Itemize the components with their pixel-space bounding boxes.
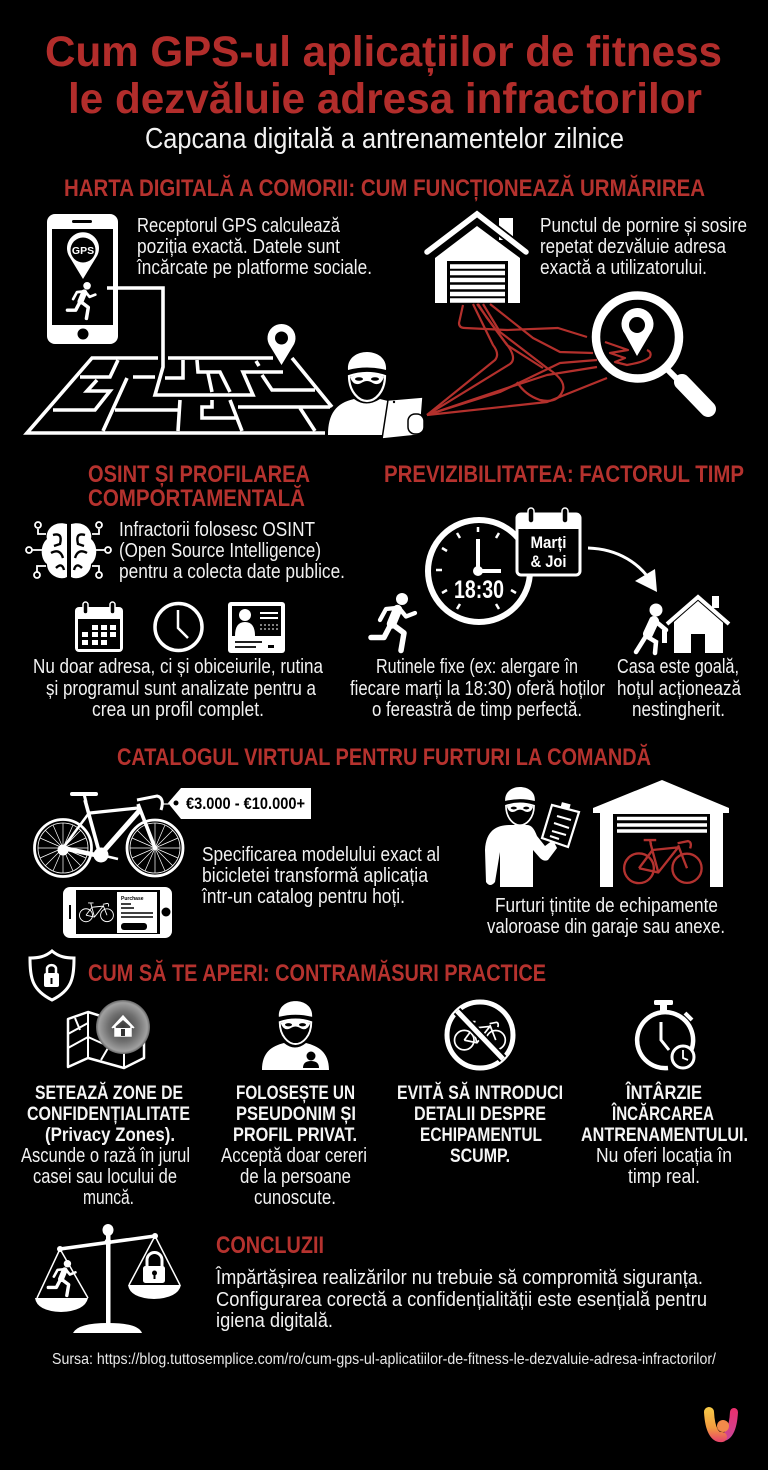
text: nu doar adresa: și programul sunt analizate pentru a [46, 678, 317, 700]
icon: street map with route [27, 288, 332, 433]
text: receptorul GPS: încărcate pe platforme sociale. [136, 257, 372, 279]
icon: road bike [34, 794, 183, 876]
icon: phone with listing [63, 887, 172, 938]
text: specificarea modelului [201, 844, 440, 908]
text: rutinele fixe: fiecare marți la 18:30) oferă hoților [350, 678, 605, 700]
icon: clock 18:30 [428, 520, 530, 622]
text: nu doar adresa: crea un profil complet. [92, 699, 264, 721]
heading: countermeasures: CUM SĂ TE APERI: CONTRAMĂSURI PRACTICE [88, 959, 546, 987]
panel: catalog [34, 743, 729, 938]
panel: previzibilitatea [350, 461, 744, 721]
heading: catalog: CATALOGUL VIRTUAL PENTRU FURTURI LA COMANDĂ [117, 743, 651, 771]
text: pseudonym: de la persoane [240, 1166, 351, 1188]
title: le dezvăluie adresa infractorilor [68, 75, 702, 123]
text: casa este goala: nestingherit. [632, 699, 725, 721]
logo [709, 1412, 734, 1437]
text: furturi tintite: Furturi țintite de echipamente [495, 895, 718, 917]
text: privacy zones: casei sau locului de [33, 1166, 177, 1188]
text: privacy zones: muncă. [83, 1187, 134, 1209]
text: receptorul GPS: Receptorul GPS calculează [137, 215, 341, 237]
price tag: €3.000 - €10.000+ [186, 795, 305, 813]
text: infractorii folosesc OSINT: pentru a colecta date publice. [119, 561, 345, 583]
text: furturi tintite [487, 895, 725, 938]
title: Cum GPS-ul aplicațiilor de fitness [45, 28, 722, 76]
text: concluzii body: igiena digitală. [216, 1310, 333, 1332]
text: pseudonym [221, 1082, 367, 1209]
icon: magnifying glass with pin [596, 296, 708, 409]
text: rutinele fixe: Rutinele fixe (ex: alergare în [376, 656, 578, 678]
subtitle: Capcana digitală a antrenamentelor zilnice [145, 123, 624, 155]
icon: phone with GPS pin and runner: GPS [72, 245, 94, 257]
arrow [588, 548, 657, 592]
icon: no expensive bike [447, 1002, 513, 1068]
text: privacy zones: (Privacy Zones). [45, 1124, 175, 1146]
text: pseudonym: Acceptă doar cereri [221, 1145, 367, 1167]
text: furturi tintite: valoroase din garaje sau anexe. [487, 916, 725, 938]
icon: thief with checklist [485, 787, 579, 887]
text: avoid details: ECHIPAMENTUL [420, 1124, 542, 1146]
panel: conclusion [35, 1224, 707, 1333]
text: delay upload [581, 1080, 748, 1188]
icon: shield lock [30, 951, 74, 1000]
text: infractorii folosesc OSINT: (Open Source Intelligence) [119, 540, 321, 562]
icon: phone with listing: Purchase [121, 896, 144, 902]
icon: thief with tablet [328, 352, 424, 439]
text: privacy zones: Ascunde o rază în jurul [21, 1145, 190, 1167]
icon: calendar marti si joi [517, 508, 580, 575]
text: receptorul GPS [136, 215, 372, 279]
price tag [168, 788, 311, 819]
text: casa este goala [617, 656, 742, 721]
panel: countermeasures [21, 951, 748, 1209]
panel: harta digitala [27, 174, 747, 439]
panel: OSINT [26, 461, 345, 721]
text: punctul de pornire: exactă a utilizatorului. [540, 257, 707, 279]
text: casa este goala: hoțul acționează [617, 678, 742, 700]
text: specificarea modelului: într-un catalog pentru hoți. [201, 886, 405, 908]
text: delay upload: Nu oferi locația în [596, 1145, 732, 1167]
heading: OSINT: OSINT ȘI PROFILAREA [88, 461, 310, 488]
text: punctul de pornire [540, 215, 747, 279]
heading: concluzii: CONCLUZII [216, 1232, 324, 1259]
icon: privacy zone map [68, 1000, 150, 1068]
icon: burglar at house [636, 596, 729, 653]
text: delay upload: timp real. [628, 1166, 700, 1188]
icon: calendar marti si joi: Marți [530, 533, 566, 552]
text: infractorii folosesc OSINT: Infractorii folosesc OSINT [119, 519, 315, 541]
text: avoid details: SCUMP. [450, 1145, 510, 1167]
icon: balance scales [35, 1224, 181, 1333]
icon: stopwatch [637, 1000, 694, 1068]
text: infractorii folosesc OSINT [119, 519, 345, 583]
text: rutinele fixe [350, 656, 605, 721]
text: receptorul GPS: poziția exactă. Datele sunt [137, 236, 340, 258]
text: pseudonym: PROFIL PRIVAT. [233, 1124, 357, 1146]
text: punctul de pornire: repetat dezvăluie adresa [540, 236, 727, 258]
text: delay upload: ÎNCĂRCAREA [611, 1101, 714, 1125]
heading: OSINT [88, 461, 310, 512]
text: rutinele fixe: o fereastră de timp perfectă. [372, 699, 582, 721]
text: concluzii body [215, 1266, 707, 1332]
text: pseudonym: PSEUDONIM ȘI [236, 1103, 356, 1125]
icon: garage with red bike [593, 780, 729, 887]
text: casa este goala: Casa este goală, [617, 656, 739, 678]
text: privacy zones [21, 1081, 190, 1209]
text: avoid details [397, 1081, 563, 1167]
title [45, 28, 722, 123]
text: delay upload: ÎNTÂRZIE [625, 1080, 702, 1104]
text: avoid details: DETALII DESPRE [414, 1103, 546, 1125]
text: concluzii body: Împărtășirea realizărilor nu trebuie să compromită siguranța. [215, 1266, 703, 1289]
text: specificarea modelului: bicicletei transformă aplicația [202, 865, 429, 887]
text: pseudonym: FOLOSEȘTE UN [236, 1082, 355, 1104]
text: privacy zones: SETEAZĂ ZONE DE [35, 1081, 183, 1104]
icon: clock [155, 604, 202, 650]
icon: brain circuit [26, 522, 111, 578]
text: specificarea modelului: Specificarea modelului exact al [202, 844, 440, 866]
heading: OSINT: COMPORTAMENTALĂ [88, 484, 305, 512]
icon: pseudonym profile [262, 1001, 329, 1070]
icon: profile card [228, 602, 285, 653]
icon: clock 18:30: 18:30 [454, 576, 504, 604]
icon: runner [371, 593, 415, 650]
text: nu doar adresa [33, 656, 324, 721]
text: privacy zones: CONFIDENȚIALITATE [27, 1103, 190, 1125]
icon: red GPS tracks [427, 304, 651, 415]
icon: map pin [268, 324, 296, 365]
icon: calendar [75, 602, 123, 652]
text: avoid details: EVITĂ SĂ INTRODUCI [397, 1081, 563, 1104]
text: concluzii body: Configurarea corectă a confidențialității este esențială pentru [216, 1289, 707, 1311]
icon: house with garage [427, 214, 526, 303]
icon: calendar marti si joi: & Joi [530, 552, 566, 571]
text: nu doar adresa: Nu doar adresa, ci și obiceiurile, rutina [33, 656, 324, 678]
text: pseudonym: cunoscute. [254, 1187, 336, 1209]
icon: phone with GPS pin and runner [47, 214, 118, 344]
